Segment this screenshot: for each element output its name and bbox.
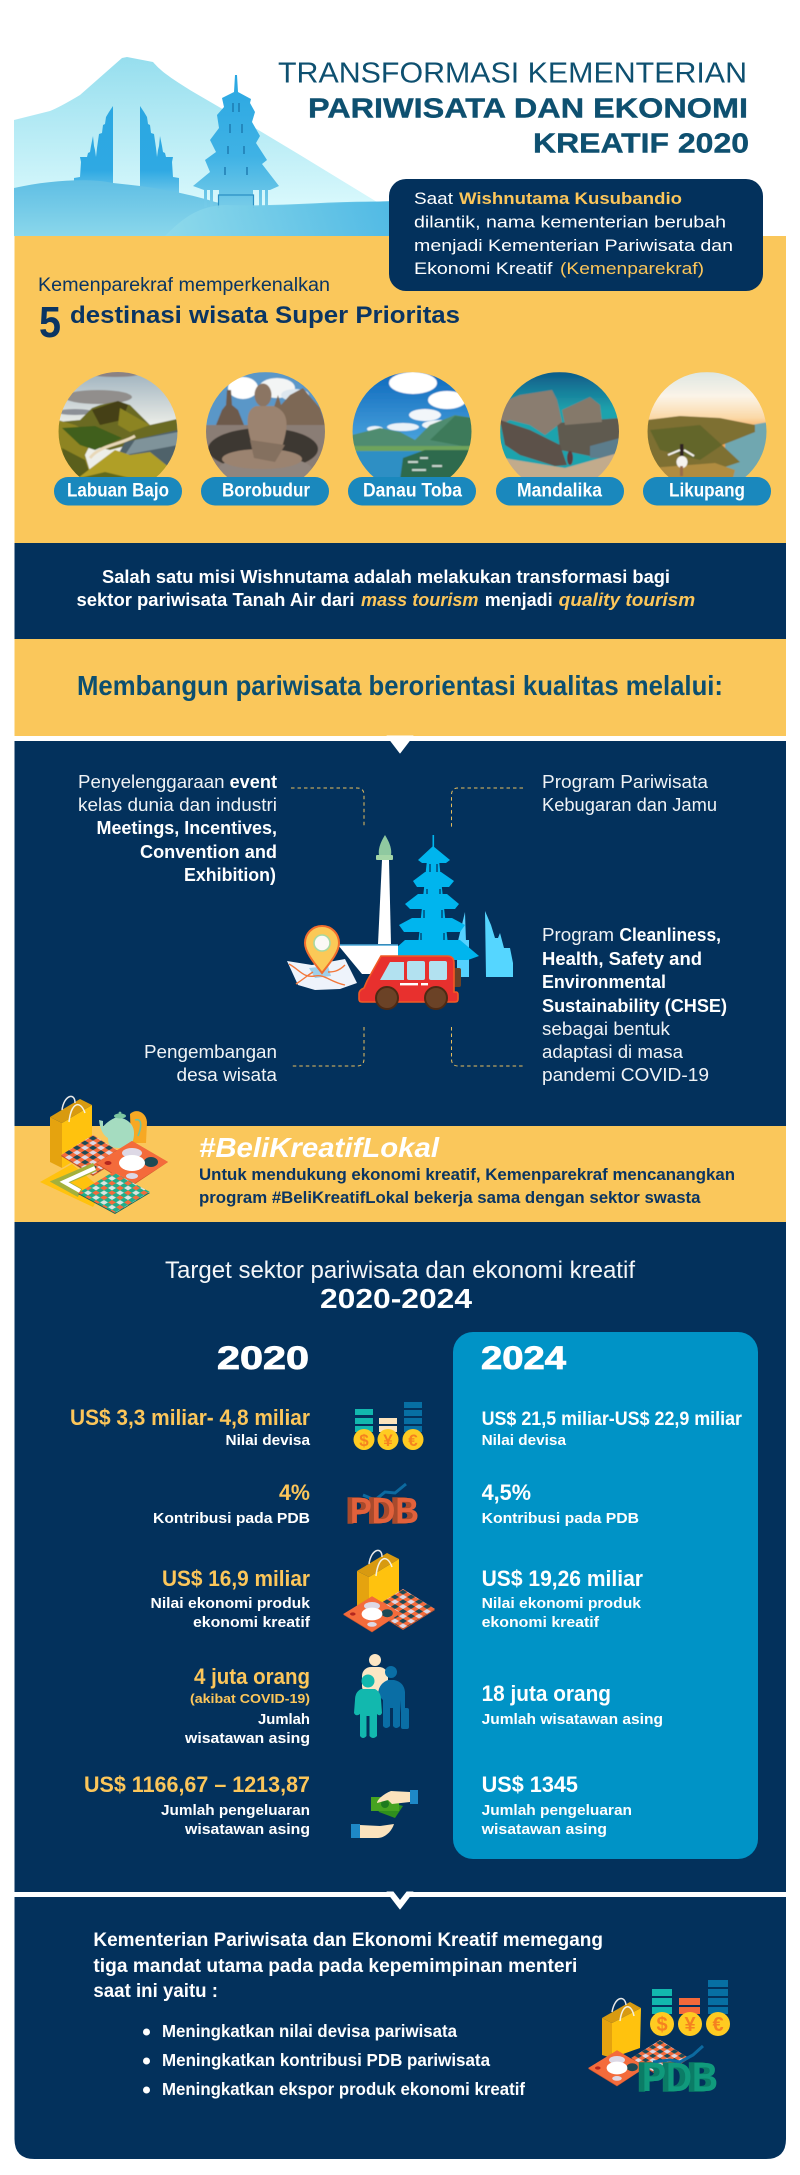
heading band: quality tourism: Membangun pariwisata berorientasi kualitas melalui: bbox=[77, 670, 723, 701]
panel: 2024 column: US$ 19,26 miliar bbox=[482, 1566, 643, 1591]
text: event: Convention and bbox=[140, 842, 277, 862]
pill: Mandalika: Mandalika bbox=[517, 480, 602, 502]
callout: Wishnutama: (Kemenparekraf) bbox=[560, 259, 704, 278]
text: CHSE: Sustainability (CHSE) bbox=[542, 996, 727, 1016]
text: desa wisata bbox=[144, 1042, 278, 1085]
heading: 5 destinasi: 5 bbox=[39, 298, 61, 347]
icon: tourists bbox=[354, 1654, 409, 1738]
panel: 2024 column bbox=[453, 1332, 758, 1859]
text: kebugaran bbox=[542, 772, 717, 815]
icon: creative economy cluster: ¥ bbox=[684, 2014, 696, 2036]
panel: 2024 column: ekonomi kreatif bbox=[482, 1614, 600, 1631]
list: mandates: Meningkatkan nilai devisa pariwisata bbox=[162, 2021, 457, 2041]
text: CHSE: sebagai bentuk bbox=[542, 1019, 671, 1039]
panel: mandates bbox=[14, 1891, 786, 2159]
pill: Likupang bbox=[643, 477, 771, 506]
icon: tourism landmarks bbox=[287, 835, 513, 1009]
icon: creative products bbox=[40, 1096, 168, 1214]
pill: Labuan Bajo bbox=[54, 477, 182, 506]
column: 2020: wisatawan asing bbox=[184, 1821, 310, 1838]
text: event: Meetings, Incentives, bbox=[96, 818, 277, 838]
list: mandates bbox=[143, 2021, 525, 2099]
icon: currency coins: € bbox=[408, 1431, 418, 1450]
pill: Likupang: Likupang bbox=[669, 480, 745, 502]
pill: Danau Toba bbox=[348, 477, 476, 506]
text: CHSE: Program bbox=[542, 925, 614, 945]
text: CHSE: adaptasi di masa bbox=[542, 1042, 684, 1062]
panel: 2024 column: Nilai devisa bbox=[482, 1432, 567, 1449]
panel: mission: sektor pariwisata Tanah Air dari bbox=[76, 590, 354, 610]
column: 2020: ekonomi kreatif bbox=[193, 1614, 311, 1631]
text: CHSE: Cleanliness, bbox=[619, 925, 721, 945]
icon: creative economy cluster: PDB bbox=[642, 2054, 718, 2100]
callout: Wishnutama: dilantik, nama kementerian berubah bbox=[414, 212, 726, 232]
text: mandates intro: tiga mandat utama pada pada kepemimpinan menteri bbox=[93, 1956, 577, 1977]
callout: Wishnutama: Saat bbox=[414, 189, 453, 208]
column: 2020: wisatawan asing bbox=[184, 1730, 310, 1747]
text: event bbox=[78, 772, 277, 885]
icon: PDB orange: PDB bbox=[346, 1490, 414, 1531]
column: 2020: 2020 bbox=[217, 1340, 309, 1376]
icon: creative economy cluster: PDB bbox=[637, 2054, 713, 2100]
panel: mission bbox=[14, 543, 786, 639]
column: 2020: US$ 1166,67 – 1213,87 bbox=[84, 1772, 310, 1797]
panel: mission: mass tourism bbox=[361, 590, 478, 610]
icon: money exchange bbox=[351, 1790, 418, 1838]
panel: 2024 column: Nilai ekonomi produk bbox=[482, 1595, 642, 1612]
text: kebugaran: Program Pariwisata bbox=[542, 772, 709, 792]
hero illustration: mountain, gates and temple bbox=[14, 57, 390, 236]
column: 2020: Kontribusi pada PDB bbox=[153, 1510, 310, 1527]
photo: Likupang bbox=[648, 372, 766, 477]
callout: Wishnutama: Wishnutama Kusubandio bbox=[459, 189, 682, 208]
text: mandates intro bbox=[93, 1930, 603, 2002]
text: event: kelas dunia dan industri bbox=[78, 795, 277, 815]
list: mandates: Meningkatkan ekspor produk ekonomi kreatif bbox=[162, 2079, 525, 2099]
text: desa wisata: desa wisata bbox=[176, 1065, 278, 1085]
panel: targets bbox=[14, 1222, 786, 1892]
list: mandates: Meningkatkan kontribusi PDB pariwisata bbox=[162, 2050, 490, 2070]
band: BeliKreatifLokal bbox=[14, 1126, 786, 1222]
callout: Wishnutama: menjadi Kementerian Pariwisata dan bbox=[414, 236, 733, 255]
heading: targets bbox=[165, 1257, 635, 1314]
heading: targets: Target sektor pariwisata dan ekonomi kreatif bbox=[165, 1257, 635, 1284]
text: event: event bbox=[230, 772, 277, 792]
panel: 2024 column: 4,5% bbox=[482, 1480, 531, 1505]
icon: creative economy cluster: $ bbox=[656, 2014, 668, 2036]
title: KREATIF 2020 bbox=[533, 128, 749, 158]
photo: Labuan Bajo bbox=[58, 372, 178, 477]
text: CHSE: Environmental bbox=[542, 972, 666, 992]
text: event: Exhibition) bbox=[184, 865, 276, 885]
pill: Danau Toba: Danau Toba bbox=[363, 480, 462, 502]
pill: Mandalika bbox=[496, 477, 624, 506]
icon: creative economy cluster bbox=[588, 1980, 730, 2100]
column: 2020: (akibat COVID-19) bbox=[190, 1691, 310, 1706]
band: BeliKreatifLokal: Untuk mendukung ekonomi kreatif, Kemenparekraf mencanangkan bbox=[199, 1165, 735, 1184]
callout: Wishnutama: Ekonomi Kreatif bbox=[414, 259, 553, 278]
column: 2020: Nilai ekonomi produk bbox=[150, 1595, 311, 1612]
text: CHSE: pandemi COVID-19 bbox=[542, 1065, 709, 1085]
icon: creative economy cluster: € bbox=[712, 2014, 724, 2036]
heading: 5 destinasi bbox=[38, 275, 460, 347]
band: BeliKreatifLokal: program #BeliKreatifLokal bekerja sama dengan sektor swasta bbox=[199, 1188, 701, 1207]
text: CHSE bbox=[542, 925, 727, 1085]
pill: Labuan Bajo: Labuan Bajo bbox=[67, 480, 169, 502]
photo: Borobudur bbox=[206, 372, 325, 477]
text: CHSE: Health, Safety and bbox=[542, 949, 702, 969]
pill: Borobudur: Borobudur bbox=[222, 480, 311, 502]
text: kebugaran: Kebugaran dan Jamu bbox=[542, 795, 717, 815]
icon: currency coins: ¥ bbox=[383, 1431, 393, 1450]
photo: Danau Toba bbox=[352, 372, 472, 477]
heading: 5 destinasi: Kemenparekraf memperkenalkan bbox=[38, 275, 330, 296]
panel: 2024 column: 18 juta orang bbox=[482, 1681, 611, 1706]
icon: currency coins: $ bbox=[359, 1431, 369, 1450]
column: 2020: 4 juta orang bbox=[194, 1664, 310, 1689]
callout: Wishnutama bbox=[389, 179, 763, 291]
photo: Mandalika bbox=[500, 372, 619, 477]
title: TRANSFORMASI KEMENTERIAN bbox=[278, 58, 747, 90]
panel: 2024 column: Jumlah pengeluaran bbox=[482, 1802, 632, 1819]
pill: Borobudur bbox=[201, 477, 329, 506]
panel: programs bbox=[14, 736, 786, 1126]
panel: 2024 column: Kontribusi pada PDB bbox=[482, 1510, 639, 1527]
panel: mission: menjadi bbox=[485, 590, 553, 610]
panel: 2024 column: 2024 bbox=[481, 1340, 566, 1376]
title bbox=[278, 58, 749, 158]
panel: 2024 column: US$ 1345 bbox=[482, 1772, 578, 1797]
icon: currency coins bbox=[354, 1402, 424, 1450]
icon: bag and mats bbox=[343, 1550, 435, 1632]
column: 2020: US$ 16,9 miliar bbox=[162, 1566, 310, 1591]
text: mandates intro: Kementerian Pariwisata dan Ekonomi Kreatif memegang bbox=[93, 1930, 603, 1951]
panel: 2024 column: wisatawan asing bbox=[481, 1821, 607, 1838]
column: 2020: Nilai devisa bbox=[226, 1432, 311, 1449]
column: 2020: Jumlah pengeluaran bbox=[161, 1802, 310, 1819]
text: event: Penyelenggaraan bbox=[78, 772, 224, 792]
panel: destinations bbox=[14, 179, 786, 543]
panel: 2024 column: US$ 21,5 miliar-US$ 22,9 miliar bbox=[482, 1409, 743, 1430]
column: 2020: US$ 3,3 miliar- 4,8 miliar bbox=[70, 1405, 310, 1430]
column: 2020: 4% bbox=[279, 1480, 310, 1505]
band: BeliKreatifLokal: #BeliKreatifLokal bbox=[199, 1132, 440, 1163]
column: 2020 bbox=[70, 1340, 311, 1838]
heading: 5 destinasi: destinasi wisata Super Prioritas bbox=[70, 302, 460, 329]
text: mandates intro: saat ini yaitu : bbox=[93, 1981, 218, 2002]
panel: mission: Salah satu misi Wishnutama adalah melakukan transformasi bagi bbox=[102, 567, 670, 587]
heading band: quality tourism bbox=[14, 639, 786, 736]
heading: targets: 2020-2024 bbox=[320, 1283, 472, 1314]
text: desa wisata: Pengembangan bbox=[144, 1042, 277, 1062]
panel: mission: quality tourism bbox=[559, 590, 695, 610]
icon: PDB orange: PDB bbox=[350, 1490, 419, 1531]
panel: 2024 column: Jumlah wisatawan asing bbox=[482, 1711, 663, 1728]
column: 2020: Jumlah bbox=[258, 1711, 310, 1728]
title: PARIWISATA DAN EKONOMI bbox=[308, 92, 748, 124]
